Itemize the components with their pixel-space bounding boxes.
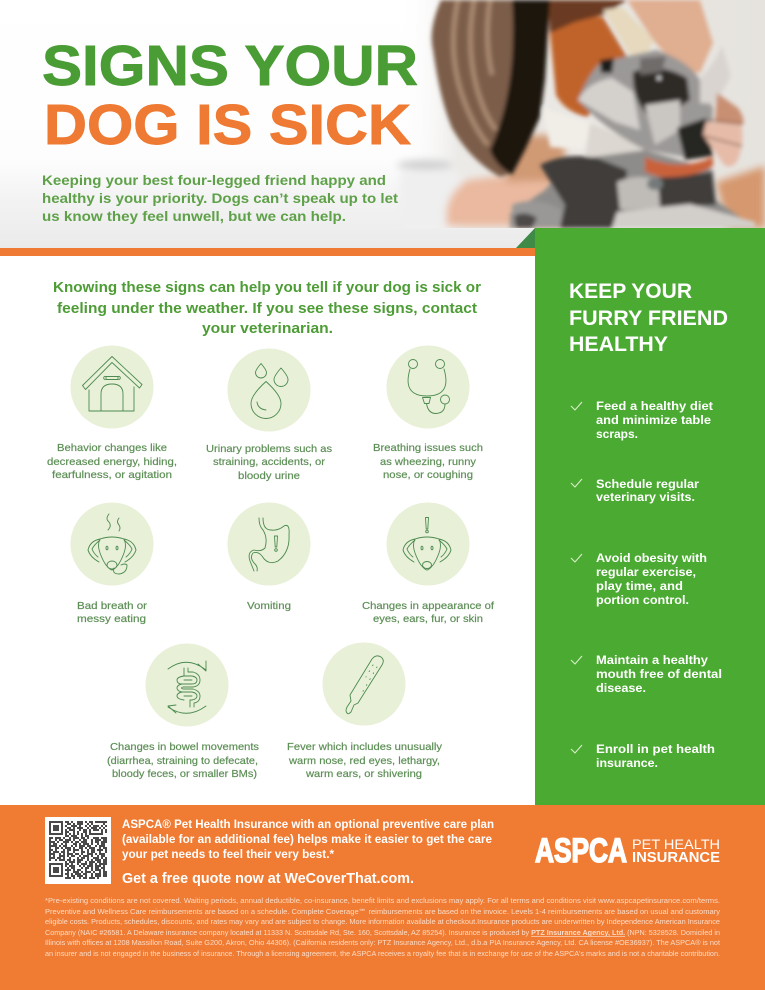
caption: urinary bbox=[206, 443, 332, 482]
footer band bbox=[0, 805, 765, 990]
title bbox=[42, 34, 418, 157]
caption: behavior: Behavior changes like bbox=[57, 442, 167, 454]
title: DOG IS SICK bbox=[44, 93, 411, 157]
icon: thermometer bbox=[322, 642, 406, 726]
tip: dental: mouth free of dental bbox=[596, 667, 722, 681]
caption: urinary: Urinary problems such as bbox=[206, 443, 332, 455]
sign: bowel movements bbox=[107, 644, 259, 780]
tip: vet visits: Schedule regular bbox=[596, 477, 699, 491]
green corner fold bbox=[516, 228, 535, 248]
panel: keep your furry friend healthy bbox=[535, 228, 765, 806]
fine print: Preventive and Wellness Care reimbursements are based on a schedule. Complete Coverage℠ reimbursements are based on the invoice. Levels 1-4 reimbursements are based on usual and customary bbox=[45, 908, 721, 916]
caption: bowel: Changes in bowel movements bbox=[110, 741, 259, 753]
signs heading: feeling under the weather. If you see these signs, contact bbox=[57, 301, 477, 317]
caption: behavior bbox=[47, 442, 177, 481]
intro text: healthy is your priority. Dogs can’t speak up to let bbox=[42, 190, 398, 206]
tip: dental: disease. bbox=[596, 681, 646, 695]
fine print: Illinois with offices at 1208 Massillon Road, Suite G200, Akron, Ohio 44306). (California residents only: PTZ Insurance Agency, Ltd., d.b.a PIA Insurance Agency, Ltd. CA license #OE36937). The ASPCA® is not bbox=[45, 939, 720, 947]
caption: bad breath: Bad breath or bbox=[77, 600, 148, 612]
tip: diet: and minimize table bbox=[596, 413, 711, 427]
sign: appearance changes bbox=[362, 502, 494, 625]
tip: obesity: Avoid obesity with bbox=[596, 551, 707, 565]
tip: diet bbox=[571, 399, 713, 441]
icon: dog with exclamation bbox=[386, 502, 470, 586]
caption: appearance: Changes in appearance of bbox=[362, 600, 494, 612]
icon: stethoscope bbox=[386, 346, 470, 428]
sign: urinary problems bbox=[206, 348, 332, 482]
hair bbox=[432, 0, 547, 177]
tip: insurance: Enroll in pet health bbox=[596, 742, 715, 756]
logo: ASPCA Pet Health Insurance: ASPCA bbox=[535, 832, 627, 870]
intro text: Keeping your best four-legged friend happy and bbox=[42, 172, 386, 188]
caption: breathing: nose, or coughing bbox=[383, 469, 473, 481]
caption: bowel bbox=[107, 741, 259, 780]
dog body bbox=[510, 150, 755, 228]
tip: insurance: insurance. bbox=[596, 756, 658, 770]
logo: ASPCA Pet Health Insurance bbox=[535, 832, 720, 870]
panel heading bbox=[569, 280, 728, 356]
signs heading bbox=[53, 280, 481, 337]
insurance message: (available for an additional fee) helps make it easier to get the care bbox=[122, 834, 492, 846]
sign: fever bbox=[287, 642, 443, 780]
fine print: *Pre-existing conditions are not covered. Waiting periods, annual deductible, co-insurance, benefit limits and exclusions may apply. For all terms and conditions visit www.aspcapetinsurance.com/terms. bbox=[45, 898, 720, 905]
tip: vet visits: veterinary visits. bbox=[596, 490, 695, 504]
tip: diet: Feed a healthy diet bbox=[596, 399, 713, 413]
signs heading: your veterinarian. bbox=[202, 321, 333, 337]
logo: ASPCA Pet Health Insurance: INSURANCE bbox=[632, 850, 720, 866]
logo: ASPCA Pet Health Insurance: PET HEALTH bbox=[632, 836, 720, 852]
insurance message bbox=[122, 819, 494, 887]
caption: bowel: (diarrhea, straining to defecate, bbox=[107, 755, 258, 767]
icon: intestines with arrows bbox=[146, 644, 228, 726]
caption: breathing bbox=[373, 442, 483, 481]
intro text: us know they feel unwell, but we can help. bbox=[42, 208, 346, 224]
caption: urinary: straining, accidents, or bbox=[213, 456, 326, 468]
tip: obesity: regular exercise, bbox=[596, 565, 696, 579]
tip: obesity: portion control. bbox=[596, 593, 689, 607]
sign: bad breath bbox=[70, 502, 154, 625]
collar bbox=[645, 157, 713, 177]
caption: appearance: eyes, ears, fur, or skin bbox=[373, 613, 483, 625]
icon: dog house bbox=[70, 346, 154, 428]
arm and top bbox=[550, 17, 633, 117]
sign: behavior changes bbox=[47, 346, 177, 481]
hand bbox=[715, 93, 743, 125]
tip: diet: scraps. bbox=[596, 427, 638, 441]
caption: breathing: as wheezing, runny bbox=[380, 456, 477, 468]
caption: behavior: fearfulness, or agitation bbox=[52, 469, 172, 481]
panel heading: KEEP YOUR bbox=[569, 280, 692, 303]
caption: urinary: bloody urine bbox=[238, 470, 300, 482]
fine print bbox=[45, 898, 721, 958]
icon: dog with odor and tongue bbox=[70, 502, 154, 586]
caption: fever bbox=[287, 741, 443, 780]
tip: dental: Maintain a healthy bbox=[596, 653, 708, 667]
icon: stomach with exclamation bbox=[228, 502, 310, 586]
fine print: eligible costs. Products, schedules, discounts, and rates may vary and are subject to change. More information available at checkout.Insurance products are underwritten by Independence American Insurance bbox=[45, 919, 720, 926]
title: SIGNS YOUR bbox=[42, 34, 418, 98]
sign: vomiting bbox=[228, 502, 310, 612]
dog head bbox=[578, 50, 713, 158]
caption: breathing: Breathing issues such bbox=[373, 442, 483, 454]
panel heading: HEALTHY bbox=[569, 333, 668, 356]
icon: water drops bbox=[228, 348, 310, 432]
caption: fever: warm ears, or shivering bbox=[305, 768, 422, 780]
caption: fever: Fever which includes unusually bbox=[287, 741, 443, 753]
photo: woman holding schnauzer dog bbox=[397, 0, 765, 228]
sign: breathing issues bbox=[373, 346, 483, 481]
panel heading: FURRY FRIEND bbox=[569, 307, 728, 330]
orange divider bar bbox=[0, 248, 535, 256]
insurance message: your pet needs to feel their very best.* bbox=[122, 849, 335, 861]
caption: bad breath: messy eating bbox=[77, 613, 146, 625]
insurance message: Get a free quote now at WeCoverThat.com. bbox=[122, 870, 414, 887]
caption: bad breath bbox=[77, 600, 148, 625]
tip: obesity: play time, and bbox=[596, 579, 683, 593]
tip: obesity bbox=[571, 551, 707, 607]
signs heading: Knowing these signs can help you tell if your dog is sick or bbox=[53, 280, 481, 296]
caption: vomiting: Vomiting bbox=[247, 600, 291, 612]
insurance message: ASPCA® Pet Health Insurance with an optional preventive care plan bbox=[122, 819, 494, 831]
fine print: an insurer and is not engaged in the business of insurance. Through a licensing agreement, the ASPCA receives a royalty fee that is in exchange for use of the ASPCA's marks and is not a charitable contribution. bbox=[45, 951, 720, 958]
caption: behavior: decreased energy, hiding, bbox=[47, 456, 177, 468]
tip: vet visits bbox=[571, 477, 699, 504]
fine print: Company (NAIC #26581. A Delaware insurance company located at 11333 N. Scottsdale Rd, Ste. 160, Scottsdale, AZ 85254). Insurance is produced by PTZ Insurance Agency, Ltd. (NPN: 5328528. Domiciled in bbox=[45, 930, 720, 937]
caption: bowel: bloody feces, or smaller BMs) bbox=[112, 768, 257, 780]
caption: fever: warm nose, red eyes, lethargy, bbox=[288, 755, 440, 767]
QR code bbox=[45, 817, 111, 884]
intro text bbox=[42, 172, 398, 224]
tip: insurance bbox=[571, 742, 715, 770]
dog ear bbox=[700, 45, 731, 104]
caption: appearance bbox=[362, 600, 494, 625]
header background bbox=[0, 0, 765, 249]
tip: dental bbox=[571, 653, 722, 695]
